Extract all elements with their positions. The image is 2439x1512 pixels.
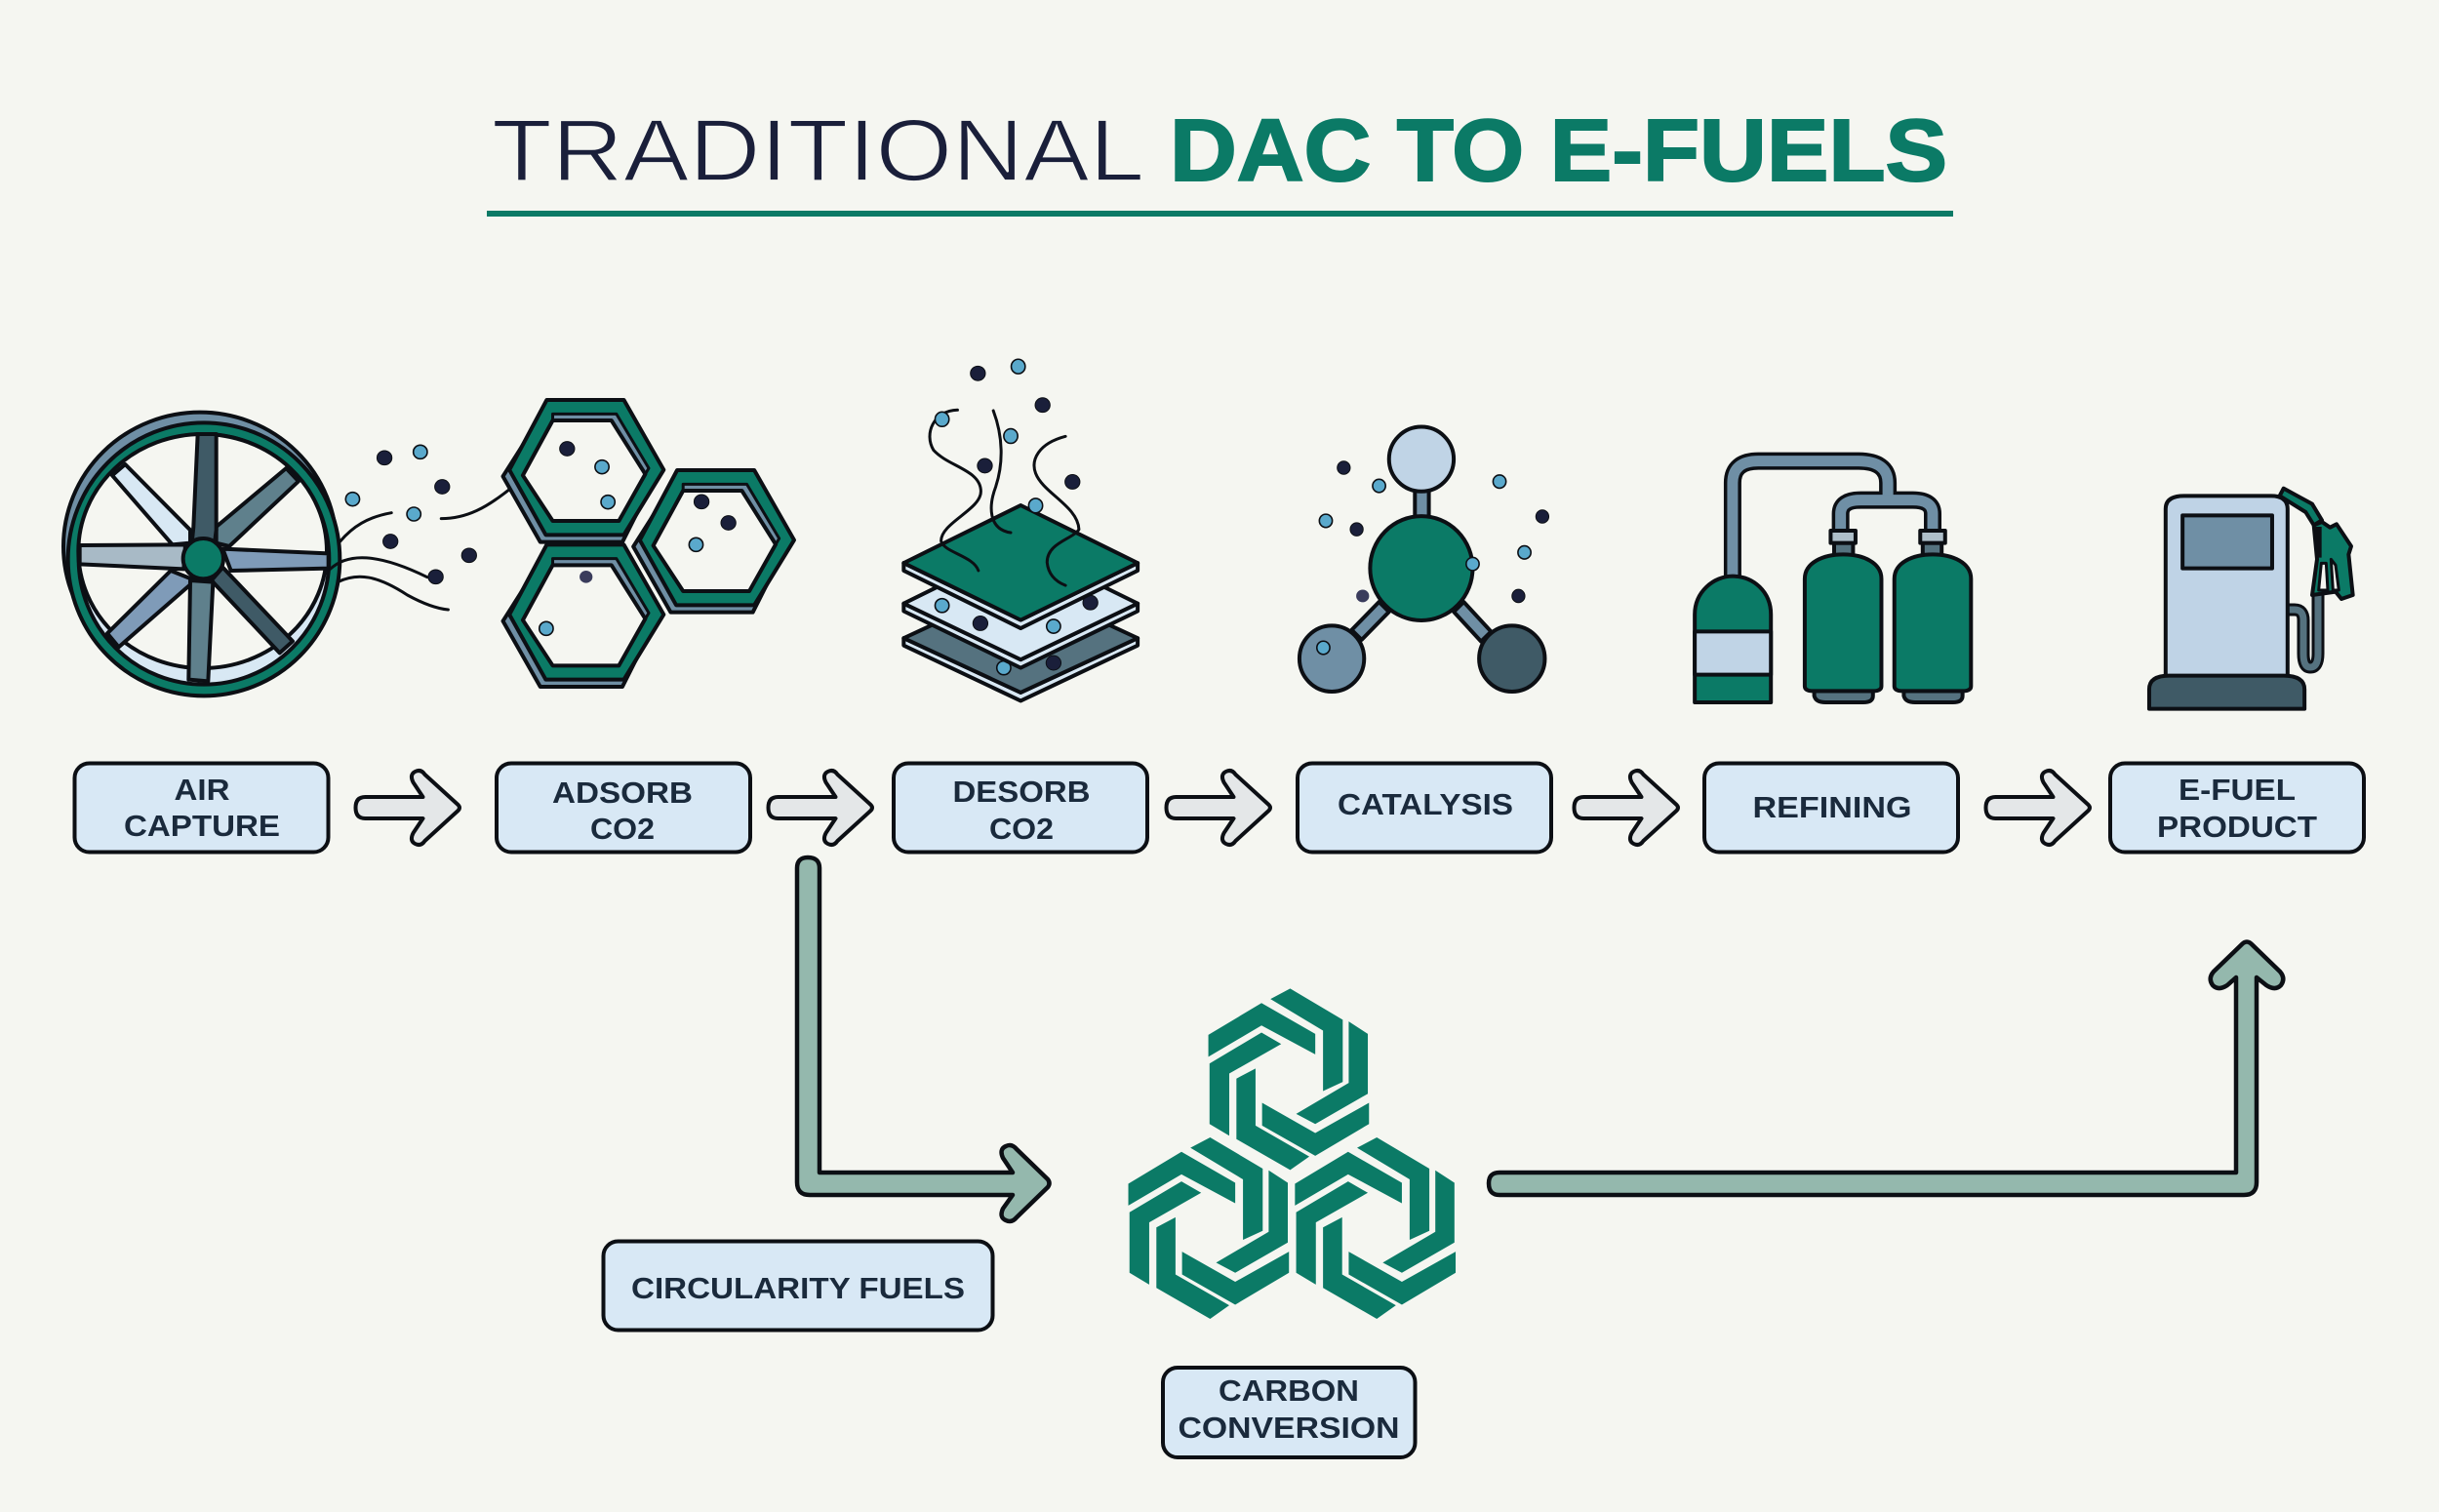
panel: catalysis <box>1298 427 1551 853</box>
icon: hexagon adsorbers <box>503 400 794 687</box>
label: catalysis <box>1298 763 1551 853</box>
icon: catalyst molecule <box>1299 427 1549 692</box>
label: carbon conversion <box>1163 1368 1415 1457</box>
icon: fuel pump <box>2149 489 2353 709</box>
label: adsorb CO2: CO2 <box>590 812 655 846</box>
arrow: air capture to adsorb <box>355 771 460 845</box>
label: desorb CO2: CO2 <box>989 812 1054 846</box>
icon: stacked membrane layers with released CO2 <box>903 359 1138 700</box>
label: air capture: CAPTURE <box>124 809 280 843</box>
panel: carbon conversion <box>1129 988 1456 1457</box>
arrow: circularity branch from adsorb to carbon conversion <box>797 857 1050 1221</box>
label: desorb CO2 <box>894 763 1147 853</box>
label: carbon conversion: CARBON <box>1219 1373 1359 1408</box>
label: e-fuel product <box>2110 763 2364 853</box>
arrow: adsorb to desorb <box>769 771 872 845</box>
panel: air capture <box>63 413 509 853</box>
arrow: desorb to catalysis <box>1167 771 1270 845</box>
icon: refining tanks and pipes <box>1695 461 1971 702</box>
label: carbon conversion: CONVERSION <box>1179 1411 1399 1445</box>
title: TRADITIONAL <box>492 102 1144 200</box>
title <box>492 102 1947 200</box>
label: e-fuel product: E-FUEL <box>2179 773 2296 807</box>
label: refining <box>1704 763 1958 853</box>
label: refining: REFINING <box>1752 790 1912 824</box>
arrow: refining to e-fuel product <box>1986 771 2090 845</box>
icon: interlocked hexagon logo <box>1129 988 1456 1319</box>
icon: fan wheel <box>63 413 340 696</box>
panel: desorb CO2 <box>894 359 1147 853</box>
title: DAC TO E-FUELS <box>1170 102 1947 200</box>
label: adsorb CO2 <box>497 763 750 853</box>
label: catalysis: CATALYSIS <box>1338 787 1513 821</box>
arrow: carbon conversion to e-fuel product <box>1489 942 2283 1195</box>
panel: refining <box>1695 461 1971 853</box>
label: adsorb CO2: ADSORB <box>552 776 693 810</box>
panel: e-fuel product <box>2110 489 2364 853</box>
label: air capture <box>74 763 328 853</box>
arrow: catalysis to refining <box>1575 771 1678 845</box>
panel: adsorb CO2 <box>497 400 794 853</box>
label: desorb CO2: DESORB <box>952 775 1091 809</box>
label: circularity fuels: CIRCULARITY FUELS <box>631 1271 965 1305</box>
label: air capture: AIR <box>174 773 230 807</box>
label: e-fuel product: PRODUCT <box>2157 810 2317 844</box>
air streams and CO2 particles <box>330 445 509 610</box>
label: circularity fuels <box>603 1241 993 1331</box>
